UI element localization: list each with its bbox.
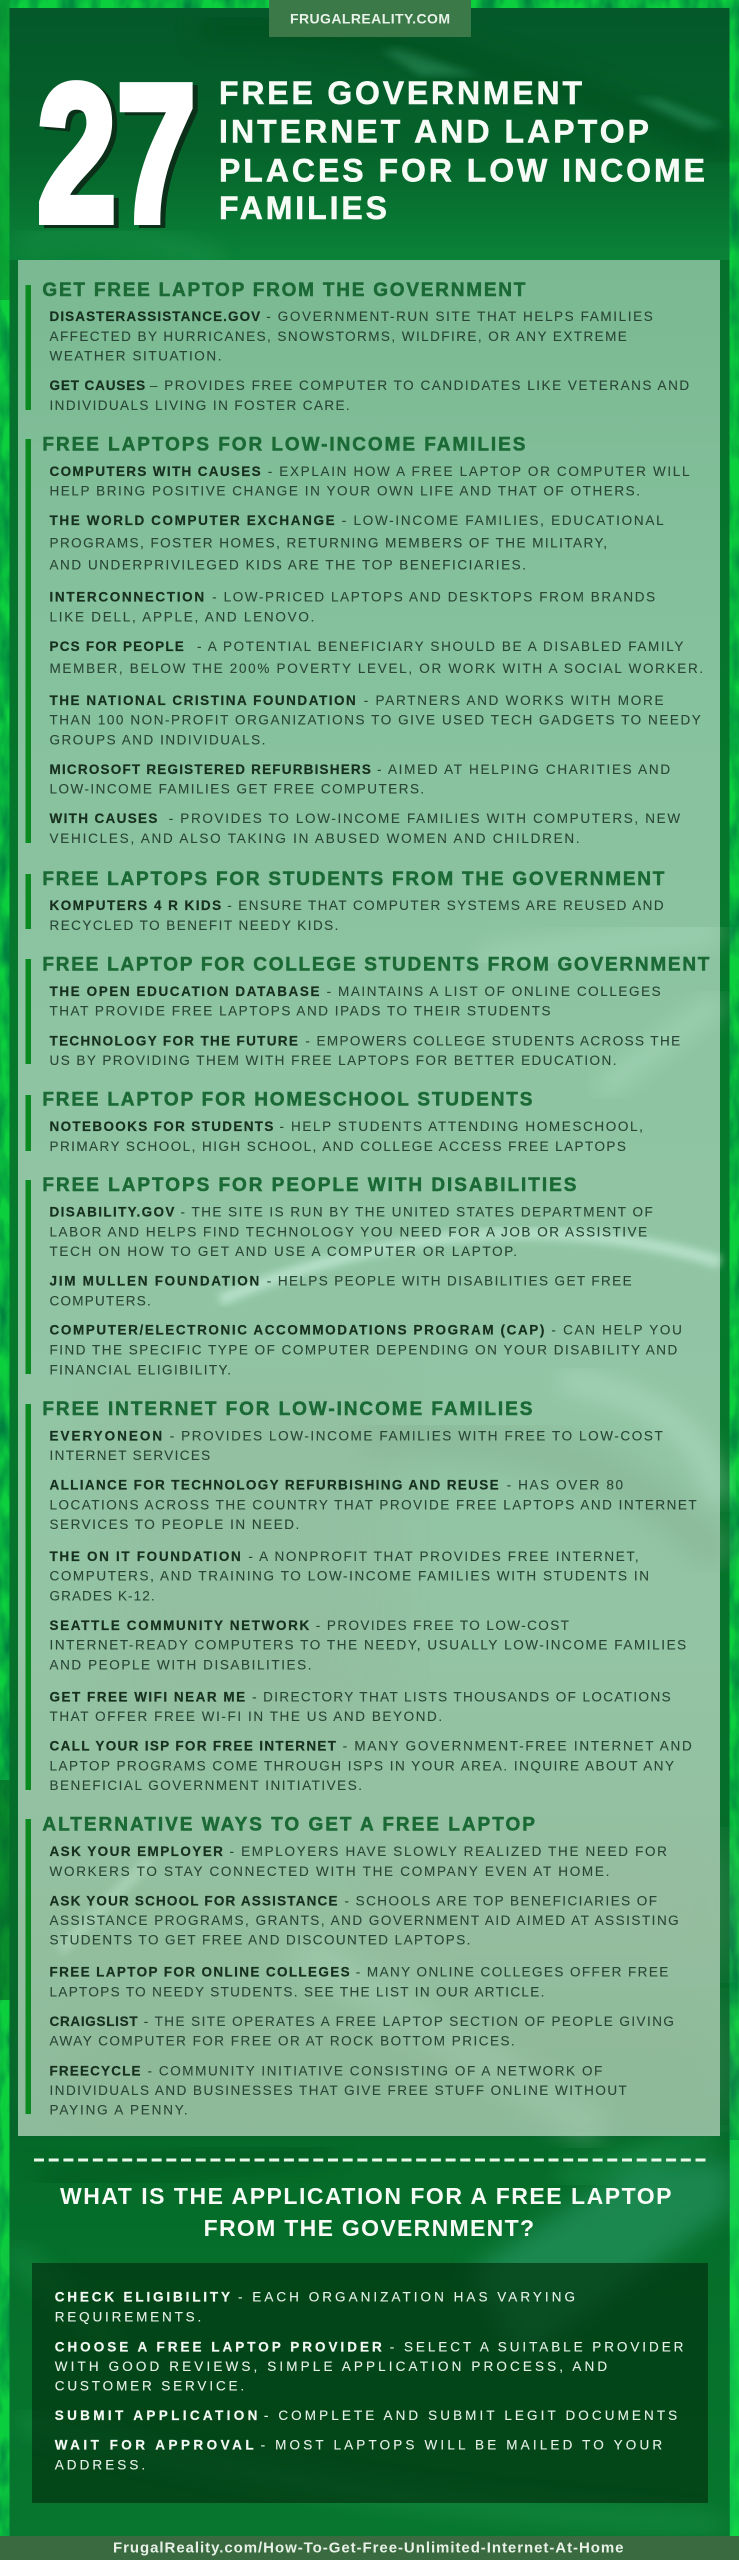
panel: application steps — [32, 2263, 708, 2503]
entry: the on it foundation: COMPUTERS, AND TRAINING TO LOW-INCOME FAMILIES WITH STUDENTS IN — [50, 1569, 649, 1584]
entry: alliance for technology refurbishing and reuse: ALLIANCE FOR TECHNOLOGY REFURBISHING AND REUSE — [50, 1478, 499, 1493]
entry: notebooks for students — [50, 1119, 643, 1154]
entry: computers with causes: COMPUTERS WITH CAUSES — [50, 464, 261, 479]
entry: the world computer exchange: AND UNDERPRIVILEGED KIDS ARE THE TOP BENEFICIARIES. — [50, 557, 526, 572]
entry: freecycle — [50, 2063, 627, 2118]
entry: ask your school for assistance: - SCHOOLS ARE TOP BENEFICIARIES OF — [344, 1893, 657, 1908]
entry: jim mullen foundation — [50, 1274, 632, 1308]
entry: free laptop for online colleges: LAPTOPS TO NEEDY STUDENTS. SEE THE LIST IN OUR ARTICLE. — [50, 1984, 544, 1999]
entry: interconnection: INTERCONNECTION — [50, 590, 204, 605]
entry: jim mullen foundation: COMPUTERS. — [50, 1293, 151, 1308]
entry: computer/electronic accommodations program: FINANCIAL ELIGIBILITY. — [50, 1362, 231, 1377]
entry: everyoneon — [50, 1428, 663, 1463]
step: choose a free laptop provider: CUSTOMER SERVICE. — [55, 2379, 244, 2394]
entry: free laptop for online colleges: - MANY ONLINE COLLEGES OFFER FREE — [356, 1965, 668, 1980]
entry: the world computer exchange — [50, 513, 664, 572]
entry: the on it foundation: GRADES K-12. — [50, 1588, 155, 1603]
entry: disasterassistance.gov: WEATHER SITUATION. — [50, 349, 222, 364]
heading: FREE LAPTOP FOR HOMESCHOOL STUDENTS — [42, 1090, 532, 1111]
step: submit application — [55, 2408, 677, 2423]
entry: ask your employer — [50, 1844, 667, 1879]
entry: ask your school for assistance: ASSISTANCE PROGRAMS, GRANTS, AND GOVERNMENT AID AIMED AT ASSISTING — [50, 1913, 679, 1928]
step: check eligibility: - EACH ORGANIZATION HAS VARYING — [238, 2290, 575, 2305]
step: wait for approval — [55, 2438, 662, 2472]
section: alternative ways to get a free laptop — [26, 1815, 679, 2118]
entry: disability.gov: - THE SITE IS RUN BY THE UNITED STATES DEPARTMENT OF — [180, 1205, 653, 1220]
title: INTERNET AND LAPTOP — [219, 114, 649, 150]
step: wait for approval: - MOST LAPTOPS WILL BE MAILED TO YOUR — [261, 2438, 662, 2453]
entry: everyoneon: INTERNET SERVICES — [50, 1448, 210, 1463]
heading: GET FREE LAPTOP FROM THE GOVERNMENT — [42, 280, 526, 301]
footer band with url: FrugalReality.com/How-To-Get-Free-Unlimited-Internet-At-Home — [113, 2540, 624, 2557]
step: choose a free laptop provider: - SELECT A SUITABLE PROVIDER — [390, 2339, 684, 2354]
entry: disasterassistance.gov — [50, 309, 653, 364]
entry: disasterassistance.gov: DISASTERASSISTANCE.GOV — [50, 309, 260, 324]
entry: the open education database: - MAINTAINS A LIST OF ONLINE COLLEGES — [327, 984, 661, 999]
entry: seattle community network — [50, 1618, 686, 1672]
entry: pcs for people — [50, 639, 703, 676]
entry: the world computer exchange: THE WORLD COMPUTER EXCHANGE — [50, 513, 335, 528]
entry: alliance for technology refurbishing and reuse: SERVICES TO PEOPLE IN NEED. — [50, 1517, 299, 1532]
step: check eligibility — [55, 2290, 575, 2325]
entry: the open education database: THE OPEN EDUCATION DATABASE — [50, 984, 320, 999]
entry: interconnection: - LOW-PRICED LAPTOPS AND DESKTOPS FROM BRANDS — [212, 590, 655, 605]
application question heading: FROM THE GOVERNMENT? — [204, 2215, 534, 2241]
entry: the on it foundation: THE ON IT FOUNDATION — [50, 1549, 241, 1564]
step: check eligibility: REQUIREMENTS. — [55, 2310, 201, 2325]
entry: the open education database: THAT PROVIDE FREE LAPTOPS AND IPADS TO THEIR STUDENTS — [50, 1004, 550, 1019]
top tab: site name: FRUGALREALITY.COM — [290, 10, 450, 26]
entry: call your isp for free internet: BENEFICIAL GOVERNMENT INITIATIVES. — [50, 1778, 362, 1793]
accent bar — [26, 1404, 31, 1790]
entry: the open education database — [50, 984, 661, 1019]
entry: seattle community network: - PROVIDES FREE TO LOW-COST — [316, 1618, 569, 1633]
entry: alliance for technology refurbishing and reuse — [50, 1478, 697, 1532]
entry: disasterassistance.gov: - GOVERNMENT-RUN SITE THAT HELPS FAMILIES — [266, 309, 653, 324]
step: choose a free laptop provider: CHOOSE A FREE LAPTOP PROVIDER — [55, 2339, 382, 2354]
heading: FREE INTERNET FOR LOW-INCOME FAMILIES — [42, 1399, 532, 1420]
entry: notebooks for students: NOTEBOOKS FOR STUDENTS — [50, 1119, 273, 1134]
entry: get free wifi near me: - DIRECTORY THAT LISTS THOUSANDS OF LOCATIONS — [252, 1689, 671, 1704]
accent bar — [26, 285, 31, 410]
step: choose a free laptop provider — [55, 2339, 684, 2394]
accent bar — [26, 959, 31, 1064]
entry: alliance for technology refurbishing and reuse: LOCATIONS ACROSS THE COUNTRY THAT PROVIDE FREE LAPTOPS AND INTERNET — [50, 1497, 697, 1512]
entry: call your isp for free internet — [50, 1739, 692, 1793]
title: PLACES FOR LOW INCOME — [219, 153, 705, 189]
entry: technology for the future: TECHNOLOGY FOR THE FUTURE — [50, 1033, 298, 1048]
top tab: site name — [269, 0, 471, 37]
entry: craigslist: AWAY COMPUTER FOR FREE OR AT ROCK BOTTOM PRICES. — [50, 2034, 515, 2049]
entry: the national cristina foundation: GROUPS AND INDIVIDUALS. — [50, 732, 265, 747]
entry: ask your employer: ASK YOUR EMPLOYER — [50, 1844, 223, 1859]
entry: the national cristina foundation: THAN 100 NON-PROFIT ORGANIZATIONS TO GIVE USED TECH GADGETS TO NEEDY — [50, 713, 701, 728]
entry: call your isp for free internet: CALL YOUR ISP FOR FREE INTERNET — [50, 1739, 337, 1754]
heading: ALTERNATIVE WAYS TO GET A FREE LAPTOP — [42, 1815, 535, 1836]
step: choose a free laptop provider: WITH GOOD REVIEWS, SIMPLE APPLICATION PROCESS, AND — [55, 2359, 607, 2374]
entry: komputers 4 r kids — [50, 898, 664, 933]
entry: get free wifi near me: GET FREE WIFI NEAR ME — [50, 1689, 245, 1704]
entry: jim mullen foundation: JIM MULLEN FOUNDATION — [50, 1274, 259, 1289]
entry: disability.gov: DISABILITY.GOV — [50, 1205, 174, 1220]
entry: notebooks for students: - HELP STUDENTS ATTENDING HOMESCHOOL, — [280, 1119, 643, 1134]
entry: craigslist: CRAIGSLIST — [50, 2014, 138, 2029]
entry: the national cristina foundation: THE NATIONAL CRISTINA FOUNDATION — [50, 693, 356, 708]
entry: microsoft registered refurbishers — [50, 762, 670, 797]
application question heading — [60, 2183, 672, 2241]
entry: get causes — [50, 378, 689, 413]
entry: interconnection: LIKE DELL, APPLE, AND LENOVO. — [50, 609, 314, 624]
entry: technology for the future — [50, 1033, 680, 1068]
entry: pcs for people: PCS FOR PEOPLE — [50, 639, 184, 654]
heading: FREE LAPTOPS FOR PEOPLE WITH DISABILITIES — [42, 1175, 576, 1196]
entry: computer/electronic accommodations program: - CAN HELP YOU — [551, 1323, 682, 1338]
step: wait for approval: ADDRESS. — [55, 2457, 145, 2472]
entry: freecycle: FREECYCLE — [50, 2063, 140, 2078]
heading: FREE LAPTOP FOR COLLEGE STUDENTS FROM GOVERNMENT — [42, 955, 710, 976]
accent bar — [26, 874, 31, 929]
entry: microsoft registered refurbishers: MICROSOFT REGISTERED REFURBISHERS — [50, 762, 371, 777]
entry: freecycle: - COMMUNITY INITIATIVE CONSISTING OF A NETWORK OF — [148, 2063, 602, 2078]
entry: freecycle: INDIVIDUALS AND BUSINESSES THAT GIVE FREE STUFF ONLINE WITHOUT — [50, 2083, 627, 2098]
entry: ask your employer: - EMPLOYERS HAVE SLOWLY REALIZED THE NEED FOR — [230, 1844, 667, 1859]
heading: FREE LAPTOPS FOR STUDENTS FROM THE GOVERNMENT — [42, 869, 665, 890]
accent bar — [26, 1095, 31, 1151]
entry: with causes — [50, 811, 680, 846]
entry: komputers 4 r kids: KOMPUTERS 4 R KIDS — [50, 898, 221, 913]
entry: get free wifi near me — [50, 1689, 671, 1724]
entry: the world computer exchange: PROGRAMS, FOSTER HOMES, RETURNING MEMBERS OF THE MILITARY, — [50, 535, 607, 550]
panel: translucent list background — [18, 260, 720, 2136]
entry: free laptop for online colleges: FREE LAPTOP FOR ONLINE COLLEGES — [50, 1965, 350, 1980]
step: submit application: - COMPLETE AND SUBMIT LEGIT DOCUMENTS — [264, 2408, 677, 2423]
entry: everyoneon: - PROVIDES LOW-INCOME FAMILIES WITH FREE TO LOW-COST — [170, 1428, 663, 1443]
entry: pcs for people: MEMBER, BELOW THE 200% POVERTY LEVEL, OR WORK WITH A SOCIAL WORKER. — [50, 661, 703, 676]
entry: get causes: GET CAUSES — [50, 378, 145, 393]
section: free laptops for people with disabilities — [26, 1175, 682, 1377]
entry: computers with causes: - EXPLAIN HOW A FREE LAPTOP OR COMPUTER WILL — [268, 464, 690, 479]
title: FAMILIES — [219, 190, 387, 226]
entry: freecycle: PAYING A PENNY. — [50, 2103, 188, 2118]
entry: disability.gov: LABOR AND HELPS FIND TECHNOLOGY YOU NEED FOR A JOB OR ASSISTIVE — [50, 1224, 647, 1239]
accent bar — [26, 1819, 31, 2114]
entry: ask your employer: WORKERS TO STAY CONNECTED WITH THE COMPANY EVEN AT HOME. — [50, 1864, 609, 1879]
entry: free laptop for online colleges — [50, 1965, 668, 1999]
entry: disability.gov — [50, 1205, 653, 1259]
title: FREE GOVERNMENT — [219, 75, 582, 111]
entry: craigslist — [50, 2014, 674, 2049]
entry: call your isp for free internet: - MANY GOVERNMENT-FREE INTERNET AND — [343, 1739, 692, 1754]
entry: interconnection — [50, 590, 655, 624]
entry: disability.gov: TECH ON HOW TO GET AND USE A COMPUTER OR LAPTOP. — [50, 1244, 517, 1259]
entry: the national cristina foundation: - PARTNERS AND WORKS WITH MORE — [364, 693, 664, 708]
entry: ask your school for assistance: STUDENTS TO GET FREE AND DISCOUNTED LAPTOPS. — [50, 1933, 470, 1948]
entry: pcs for people: - A POTENTIAL BENEFICIARY SHOULD BE A DISABLED FAMILY — [197, 639, 683, 654]
big number 27: 27 — [37, 44, 196, 263]
section: free laptop for college students from government — [26, 955, 710, 1068]
entry: microsoft registered refurbishers: - AIMED AT HELPING CHARITIES AND — [377, 762, 670, 777]
entry: craigslist: - THE SITE OPERATES A FREE LAPTOP SECTION OF PEOPLE GIVING — [144, 2014, 674, 2029]
entry: seattle community network: AND PEOPLE WITH DISABILITIES. — [50, 1657, 312, 1672]
footer band with url — [0, 2536, 739, 2560]
entry: computer/electronic accommodations program — [50, 1323, 682, 1377]
entry: computers with causes — [50, 464, 690, 499]
entry: the world computer exchange: - LOW-INCOME FAMILIES, EDUCATIONAL — [342, 513, 664, 528]
entry: with causes: WITH CAUSES — [50, 811, 157, 826]
entry: alliance for technology refurbishing and reuse: - HAS OVER 80 — [507, 1478, 623, 1493]
section: free internet for low-income families — [26, 1399, 697, 1793]
entry: get causes: – PROVIDES FREE COMPUTER TO CANDIDATES LIKE VETERANS AND — [150, 378, 689, 393]
entry: komputers 4 r kids: - ENSURE THAT COMPUTER SYSTEMS ARE REUSED AND — [227, 898, 664, 913]
entry: with causes: - PROVIDES TO LOW-INCOME FAMILIES WITH COMPUTERS, NEW — [169, 811, 680, 826]
section: free laptops for low-income families — [26, 435, 703, 846]
step: check eligibility: CHECK ELIGIBILITY — [55, 2290, 230, 2305]
entry: computer/electronic accommodations program: COMPUTER/ELECTRONIC ACCOMMODATIONS PROGRAM (CAP) — [50, 1323, 544, 1338]
accent bar — [26, 439, 31, 843]
entry: the on it foundation — [50, 1549, 649, 1603]
accent bar — [26, 1180, 31, 1374]
title — [219, 75, 705, 226]
entry: get causes: INDIVIDUALS LIVING IN FOSTER CARE. — [50, 398, 350, 413]
entry: with causes: VEHICLES, AND ALSO TAKING IN ABUSED WOMEN AND CHILDREN. — [50, 831, 580, 846]
step: submit application: SUBMIT APPLICATION — [55, 2408, 257, 2423]
application question heading: WHAT IS THE APPLICATION FOR A FREE LAPTOP — [60, 2183, 672, 2209]
section: free laptops for students from the government — [26, 869, 665, 933]
entry: seattle community network: INTERNET-READY COMPUTERS TO THE NEEDY, USUALLY LOW-INCOME FAMILIES — [50, 1638, 686, 1653]
entry: the national cristina foundation — [50, 693, 701, 747]
entry: the on it foundation: - A NONPROFIT THAT PROVIDES FREE INTERNET, — [248, 1549, 639, 1564]
entry: notebooks for students: PRIMARY SCHOOL, HIGH SCHOOL, AND COLLEGE ACCESS FREE LAPTOPS — [50, 1139, 626, 1154]
entry: jim mullen foundation: - HELPS PEOPLE WITH DISABILITIES GET FREE — [267, 1274, 632, 1289]
section: get free laptop from the government — [26, 280, 689, 413]
entry: disasterassistance.gov: AFFECTED BY HURRICANES, SNOWSTORMS, WILDFIRE, OR ANY EXTREME — [50, 329, 627, 344]
entry: computers with causes: HELP BRING POSITIVE CHANGE IN YOUR OWN LIFE AND THAT OF OTHERS. — [50, 484, 640, 499]
heading: FREE LAPTOPS FOR LOW-INCOME FAMILIES — [42, 435, 525, 456]
entry: komputers 4 r kids: RECYCLED TO BENEFIT NEEDY KIDS. — [50, 918, 338, 933]
entry: technology for the future: - EMPOWERS COLLEGE STUDENTS ACROSS THE — [305, 1033, 680, 1048]
section: free laptop for homeschool students — [26, 1090, 643, 1154]
entry: get free wifi near me: THAT OFFER FREE WI-FI IN THE US AND BEYOND. — [50, 1709, 442, 1724]
entry: ask your school for assistance — [50, 1893, 679, 1948]
entry: ask your school for assistance: ASK YOUR SCHOOL FOR ASSISTANCE — [50, 1893, 338, 1908]
entry: call your isp for free internet: LAPTOP PROGRAMS COME THROUGH ISPS IN YOUR AREA. INQUIRE ABOUT ANY — [50, 1758, 674, 1773]
entry: microsoft registered refurbishers: LOW-INCOME FAMILIES GET FREE COMPUTERS. — [50, 782, 424, 797]
entry: everyoneon: EVERYONEON — [50, 1428, 162, 1443]
step: wait for approval: WAIT FOR APPROVAL — [55, 2438, 254, 2453]
entry: computer/electronic accommodations program: FIND THE SPECIFIC TYPE OF COMPUTER DEPENDING ON YOUR DISABILITY AND — [50, 1343, 678, 1358]
entry: seattle community network: SEATTLE COMMUNITY NETWORK — [50, 1618, 309, 1633]
entry: technology for the future: US BY PROVIDING THEM WITH FREE LAPTOPS FOR BETTER EDUCATION. — [50, 1053, 617, 1068]
